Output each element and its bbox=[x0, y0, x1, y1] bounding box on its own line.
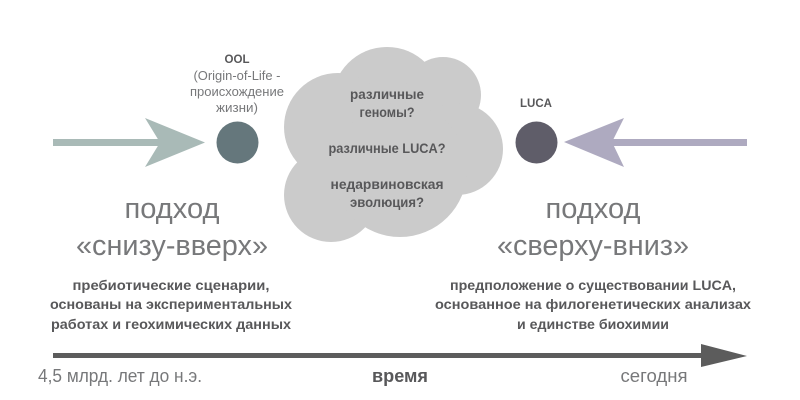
text: top-down description: основанное на филогенетических анализах bbox=[435, 296, 751, 312]
heading: bottom-up: подход bbox=[124, 193, 220, 225]
cloud questions: различные LUCA? bbox=[328, 141, 446, 156]
label: OOL bbox=[190, 52, 284, 115]
text: bottom-up description bbox=[50, 277, 292, 332]
cloud questions bbox=[328, 87, 446, 210]
label: OOL: (Origin-of-Life - bbox=[194, 68, 280, 83]
arrow: timeline bbox=[53, 344, 747, 367]
text: bottom-up description: работах и геохимических данных bbox=[51, 316, 291, 332]
text: bottom-up description: пребиотические сценарии, bbox=[72, 277, 270, 293]
label: time: время bbox=[372, 366, 428, 386]
label: OOL: происхождение bbox=[190, 84, 284, 99]
heading: bottom-up: «снизу-вверх» bbox=[76, 230, 268, 262]
arrow: bottom-up approach bbox=[53, 118, 205, 167]
heading: top-down bbox=[497, 193, 689, 262]
text: bottom-up description: основаны на экспериментальных bbox=[50, 296, 292, 312]
circle: OOL bbox=[216, 122, 258, 164]
label: LUCA: LUCA bbox=[520, 96, 552, 110]
label: timeline start: 4,5 млрд. лет до н.э. bbox=[38, 366, 202, 386]
cloud questions: недарвиновская bbox=[330, 177, 444, 192]
circle: LUCA bbox=[516, 122, 558, 164]
cloud questions: различные bbox=[350, 87, 424, 102]
heading: bottom-up bbox=[76, 193, 268, 262]
label: OOL: OOL bbox=[224, 52, 250, 66]
label: OOL: жизни) bbox=[216, 100, 258, 115]
arrow: top-down approach bbox=[564, 118, 747, 167]
text: top-down description bbox=[435, 277, 751, 332]
text: top-down description: предположение о существовании LUCA, bbox=[450, 277, 736, 293]
heading: top-down: «сверху-вниз» bbox=[497, 230, 689, 262]
label: today: сегодня bbox=[620, 366, 688, 386]
text: top-down description: и единстве биохимии bbox=[517, 316, 669, 332]
cloud questions: эволюция? bbox=[350, 195, 424, 210]
cloud bbox=[284, 47, 503, 242]
heading: top-down: подход bbox=[546, 193, 641, 225]
cloud questions: геномы? bbox=[360, 105, 414, 120]
